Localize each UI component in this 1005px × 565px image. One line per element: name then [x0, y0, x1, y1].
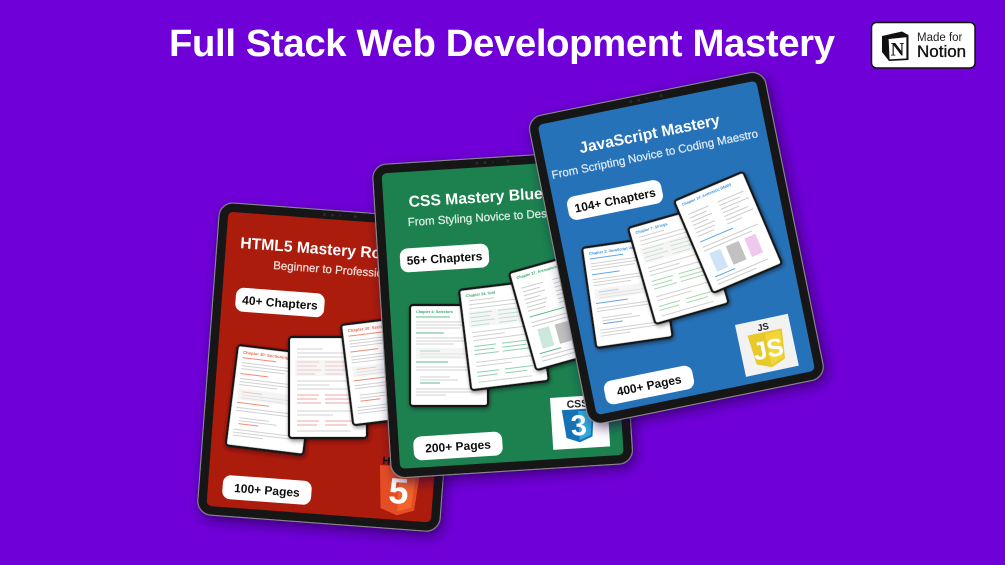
icon: CSS3 shield — [550, 394, 610, 450]
tablet body: HTML5 — [197, 202, 462, 532]
subheading: Beginner to Professional: Beginner to Professional — [273, 260, 399, 281]
page preview 2 — [289, 337, 367, 438]
page preview 3 — [341, 315, 431, 425]
page preview 3 — [509, 252, 611, 370]
page preview 1: Chapter 30: Sectioning Elements — [243, 350, 309, 363]
title: Full Stack Web Development Mastery — [169, 22, 836, 65]
page preview 3 — [674, 172, 782, 293]
heading: CSS Mastery Blueprint: CSS Mastery Blueprint — [408, 183, 579, 211]
panel: JavaScript tablet — [527, 70, 826, 426]
heading: JavaScript Mastery: JavaScript Mastery — [578, 112, 722, 157]
page preview 1: Chapter 4: Selectors — [416, 310, 453, 314]
page preview 2 — [459, 280, 549, 390]
pill: 40+ Chapters: 40+ Chapters — [242, 293, 319, 313]
icon: CSS3 shield: CSS — [566, 398, 589, 411]
pill: 100+ Pages — [222, 475, 312, 505]
page preview 2 — [628, 207, 729, 324]
page preview 1 — [582, 237, 673, 348]
icon: HTML5 shield: HTML — [382, 455, 413, 469]
badge text: Made for: Made for — [917, 32, 963, 44]
page preview 1 — [226, 345, 315, 455]
pill: 56+ Chapters — [399, 243, 490, 273]
icon: Notion cube logo: N — [891, 40, 905, 60]
page preview 2: Chapter 7: Strings — [635, 222, 668, 235]
pill: 104+ Chapters — [566, 179, 664, 221]
panel: CSS tablet — [372, 150, 633, 478]
badge text: Notion: Notion — [917, 42, 966, 61]
icon: JS shield — [735, 314, 799, 377]
tablet body: JavaScript — [527, 70, 826, 426]
page preview 1 — [410, 305, 488, 406]
page preview 3: Chapter 27: Animations — [516, 265, 558, 280]
pill: 40+ Chapters — [235, 287, 325, 318]
subheading: From Scripting Novice to Coding Maestro: From Scripting Novice to Coding Maestro — [551, 128, 759, 182]
pill: 56+ Chapters: 56+ Chapters — [406, 249, 483, 268]
tablet body: CSS — [372, 150, 633, 478]
pill: 100+ Pages: 100+ Pages — [234, 481, 301, 500]
panel: HTML5 tablet — [197, 202, 462, 532]
subheading: From Styling Novice to Design Expert: From Styling Novice to Design Expert — [407, 205, 600, 229]
page preview 3: Chapter 30: Sectioning Elements — [347, 320, 414, 333]
page preview 3: Chapter 14: Arithmetic (Math) — [681, 182, 733, 207]
heading: HTML5 Mastery Roadmap: HTML5 Mastery Roadmap — [240, 235, 432, 266]
icon: HTML5 shield — [376, 455, 422, 517]
pill: 400+ Pages: 400+ Pages — [616, 372, 683, 399]
pill: 200+ Pages — [413, 431, 503, 461]
icon: JS shield: JS — [756, 321, 770, 334]
icon: HTML5 shield: 5 — [387, 470, 410, 512]
page preview 2: Chapter 24: Grid — [466, 291, 496, 298]
pill: 200+ Pages: 200+ Pages — [425, 437, 492, 456]
pill: 400+ Pages — [603, 364, 695, 406]
icon: JS shield: JS — [750, 333, 786, 366]
icon: CSS3 shield: 3 — [570, 410, 588, 443]
badge: Made for Notion — [872, 22, 975, 68]
pill: 104+ Chapters: 104+ Chapters — [573, 185, 657, 216]
page preview 1: Chapter 3: JavaScript Variables — [589, 244, 645, 256]
